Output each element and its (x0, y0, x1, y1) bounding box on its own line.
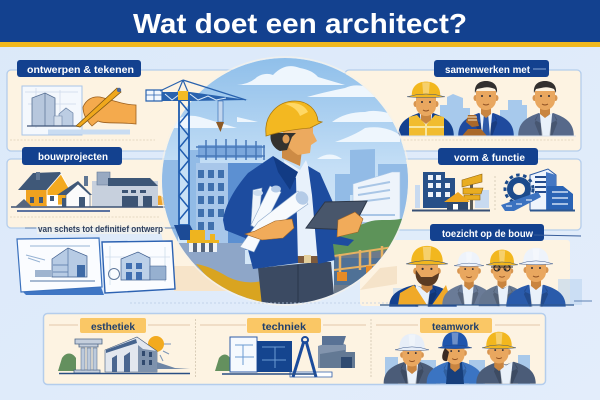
label: teamwork (420, 318, 492, 333)
icon: gavel (462, 115, 487, 136)
label: toezicht op de bouw (430, 224, 581, 241)
panel: toezicht backdrop (360, 240, 570, 306)
clouds (167, 66, 403, 159)
person: bearded foreman (389, 246, 457, 307)
header band (0, 0, 600, 47)
background skyline (162, 149, 408, 242)
label: teamwork: teamwork (432, 322, 479, 333)
rolled blueprints (240, 186, 311, 252)
label: bouwprojecten (22, 147, 122, 165)
panel: ontwerpen & tekenen (7, 70, 235, 151)
icon: blueprint, compass and house (215, 336, 355, 377)
neck and head (282, 146, 302, 166)
sketch: schets 2 (102, 241, 175, 293)
person: man with glasses (479, 250, 527, 306)
label: toezicht op de bouw: toezicht op de bouw (442, 228, 534, 240)
icon: gear, ruler and tower (501, 169, 575, 211)
tablet (306, 201, 367, 230)
label: samenwerken met: samenwerken met (445, 64, 530, 76)
central circle scene (160, 58, 410, 310)
label: vorm & functie (438, 148, 538, 165)
icon: sketch and drawing hand (22, 86, 136, 135)
label: esthetiek: esthetiek (91, 322, 135, 333)
jacket left (223, 156, 298, 269)
sketch: schets 1 (17, 238, 104, 295)
hard hat (266, 101, 322, 136)
sub-panel: techniek (215, 318, 355, 377)
sub-panel: teamwork (384, 318, 536, 384)
person: woman with white hat (442, 252, 494, 305)
icon: classic pillar and modern building (58, 336, 190, 374)
icon: houses and factory (11, 172, 165, 211)
arm and hand (245, 219, 294, 240)
person: worker in vest (398, 82, 454, 136)
person: yellow hat (476, 332, 536, 384)
icon: skyline (440, 94, 527, 136)
crane (146, 80, 248, 243)
jacket right (308, 166, 354, 264)
shirt (284, 160, 318, 256)
panel: samenwerken met (345, 70, 581, 151)
person: man in grey suit (518, 81, 574, 136)
label: vorm & functie: vorm & functie (454, 152, 525, 164)
title: Wat doet een architect? (133, 8, 467, 39)
label: ontwerpen & tekenen (17, 60, 141, 77)
label: van schets tot definitief ontwerp: van schets tot definitief ontwerp (38, 224, 163, 235)
icon: building with sign (412, 172, 490, 210)
icon: skyline (385, 355, 530, 384)
person: blue hat (427, 332, 483, 384)
panel: vorm & functie (350, 159, 581, 230)
person: man in blue suit with gavel (458, 81, 514, 136)
architect (223, 101, 367, 306)
label: techniek: techniek (262, 322, 306, 333)
building under construction (196, 139, 265, 250)
label: samenwerken met (434, 60, 549, 77)
label: bouwprojecten: bouwprojecten (38, 151, 108, 163)
icon: orange shrub (155, 196, 167, 205)
panel: bouwprojecten (7, 159, 187, 228)
panel: cream backdrop lower left (160, 228, 240, 291)
panel: bottom strip (44, 314, 546, 384)
sub-panel: esthetiek (58, 318, 190, 374)
person: man in blue jacket (506, 248, 566, 307)
white building right (353, 172, 400, 240)
circle rim (161, 57, 409, 305)
trousers (258, 262, 335, 306)
person: white hat (384, 334, 440, 384)
label: ontwerpen & tekenen: ontwerpen & tekenen (27, 64, 134, 76)
panel: toezicht op de bouw (380, 246, 592, 307)
belt (298, 256, 318, 263)
ground with sand and fence (178, 218, 402, 302)
